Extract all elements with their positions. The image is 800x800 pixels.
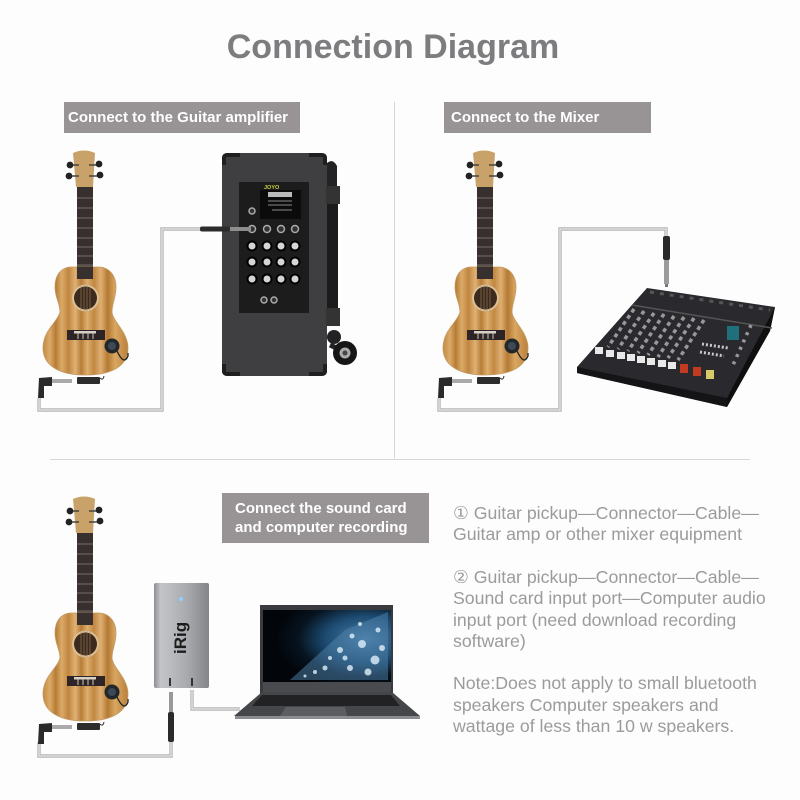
- text: connection path 2: software): [453, 631, 526, 651]
- text: connection path 2: input port (need download recording: [453, 610, 736, 630]
- text: note: [452, 673, 757, 736]
- heading: guitar amplifier: [64, 102, 300, 133]
- icon: ukulele with pickup 3: [38, 496, 128, 744]
- heading: sound card: [222, 493, 429, 543]
- text: note: speakers Computer speakers and: [453, 695, 718, 715]
- text: connection path 1: [453, 503, 759, 544]
- heading: mixer: [444, 102, 651, 133]
- text: connection path 2: [453, 567, 766, 651]
- mixer: [577, 288, 775, 407]
- text: connection path 2: ② Guitar pickup—Connector—Cable—: [453, 567, 759, 587]
- cable: sound card to laptop: [192, 690, 240, 709]
- text: connection path 1: ① Guitar pickup—Connector—Cable—: [453, 503, 759, 523]
- cable: ukulele to amplifier: [39, 229, 204, 410]
- laptop: [234, 605, 420, 719]
- jack plug to sound card: [168, 692, 174, 742]
- connector: amplifier plug: [200, 226, 251, 232]
- icon: ukulele with pickup 2: [438, 150, 528, 398]
- cable: ukulele to sound card: [39, 735, 171, 756]
- text: note: wattage of less than 10 w speakers.: [452, 716, 734, 736]
- cable: ukulele to mixer: [439, 229, 666, 410]
- heading: guitar amplifier: Connect to the Guitar amplifier: [68, 109, 288, 126]
- text: connection path 2: Sound card input port—Computer audio: [453, 588, 766, 608]
- sound card: [154, 583, 209, 688]
- text: connection path 1: Guitar amp or other mixer equipment: [453, 524, 742, 544]
- amplifier: [222, 153, 357, 376]
- icon: ukulele with pickup 1: [38, 150, 128, 398]
- heading: sound card: and computer recording: [235, 519, 408, 536]
- title: Connection Diagram: [227, 28, 559, 66]
- amplifier: JOYO: [264, 185, 280, 191]
- heading: sound card: Connect the sound card: [235, 500, 407, 517]
- sound card: iRig: [171, 622, 190, 654]
- jack plug to mixer: [663, 236, 670, 287]
- heading: mixer: Connect to the Mixer: [451, 109, 600, 126]
- text: note: Note:Does not apply to small bluetooth: [453, 673, 757, 693]
